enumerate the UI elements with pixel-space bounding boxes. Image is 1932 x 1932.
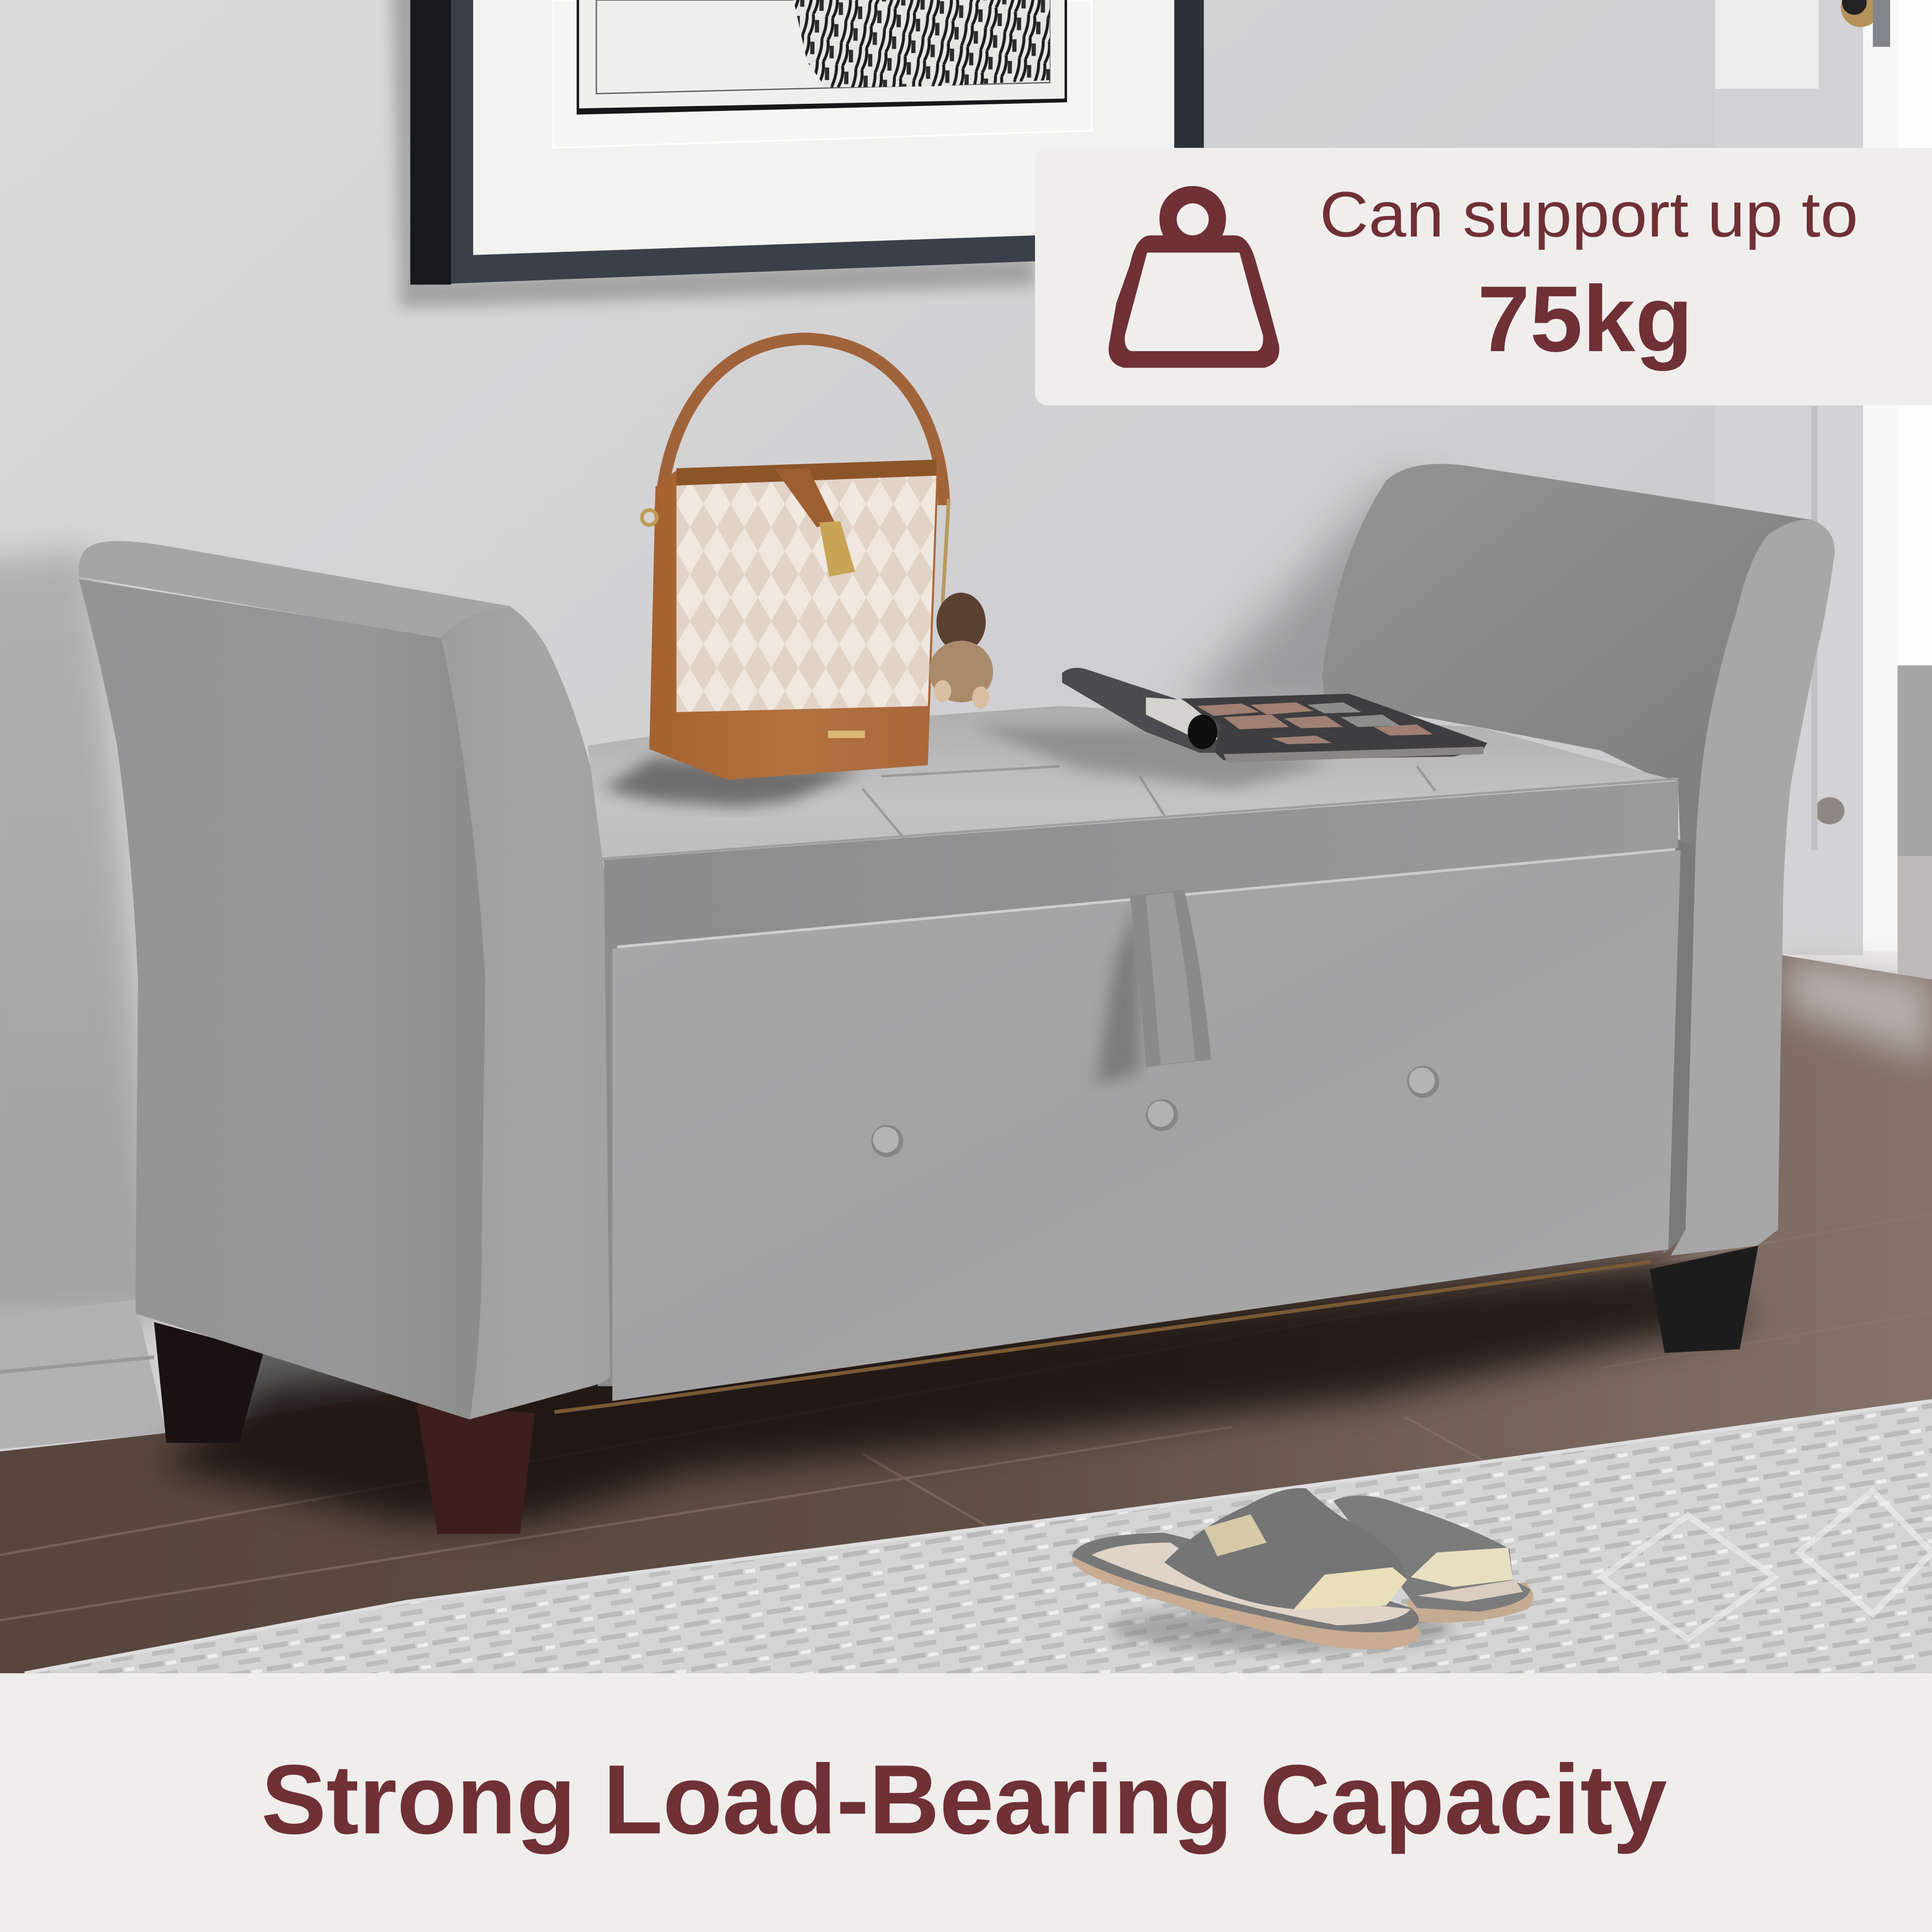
storage bench <box>78 464 1835 1534</box>
wooden floor <box>0 955 1932 1676</box>
lid front <box>604 781 1678 946</box>
callout panel: weight capacity <box>1035 148 1932 405</box>
bench rear left leg <box>154 1322 264 1443</box>
bag logo <box>828 731 865 738</box>
seat cushion top <box>588 706 1678 869</box>
wall shadow left of bench <box>0 548 166 1325</box>
icon: weight <box>1108 186 1280 368</box>
strap handle <box>1097 890 1211 1084</box>
tufted buttons <box>871 1066 1439 1157</box>
magazine <box>973 668 1487 789</box>
callout text line 1: Can support up to <box>1320 179 1858 251</box>
wall shadow behind front of bench <box>240 1343 431 1448</box>
callout value: 75kg <box>1477 266 1693 371</box>
wall art frame <box>410 0 1204 285</box>
left arm side panel <box>79 579 485 1419</box>
shadow left of and below frame <box>392 0 1035 308</box>
bottom title band <box>0 1673 1932 1932</box>
inner mat bevel <box>553 0 1092 148</box>
right arm front <box>1671 519 1835 1256</box>
left arm top lip <box>78 541 510 638</box>
slippers <box>1072 1488 1533 1651</box>
bench right leg <box>1650 1246 1758 1353</box>
left arm front <box>441 606 611 1419</box>
strip between arm and box <box>598 838 617 1386</box>
shadow of right arm on wall <box>1183 481 1442 727</box>
bag strap and gold clasp <box>775 468 834 527</box>
shadow under bench <box>160 1263 1756 1522</box>
right slipper <box>1405 1582 1533 1622</box>
artwork: animal print <box>794 0 1050 87</box>
left slipper <box>1072 1535 1420 1649</box>
handbag <box>604 339 993 807</box>
baseboard <box>0 1300 166 1449</box>
bag handle <box>660 339 944 518</box>
slipper tag <box>1204 1514 1267 1556</box>
door and frame <box>1715 0 1932 980</box>
room background <box>0 0 1932 1479</box>
title: Strong Load-Bearing Capacity <box>261 1744 1667 1854</box>
bench front left leg <box>416 1403 535 1534</box>
front storage box <box>612 850 1681 1401</box>
right arm side panel <box>1322 464 1812 855</box>
rug <box>25 1401 1932 1676</box>
bag body <box>649 460 939 780</box>
strip between box and right arm <box>1663 838 1698 1254</box>
plush charm <box>929 499 993 708</box>
